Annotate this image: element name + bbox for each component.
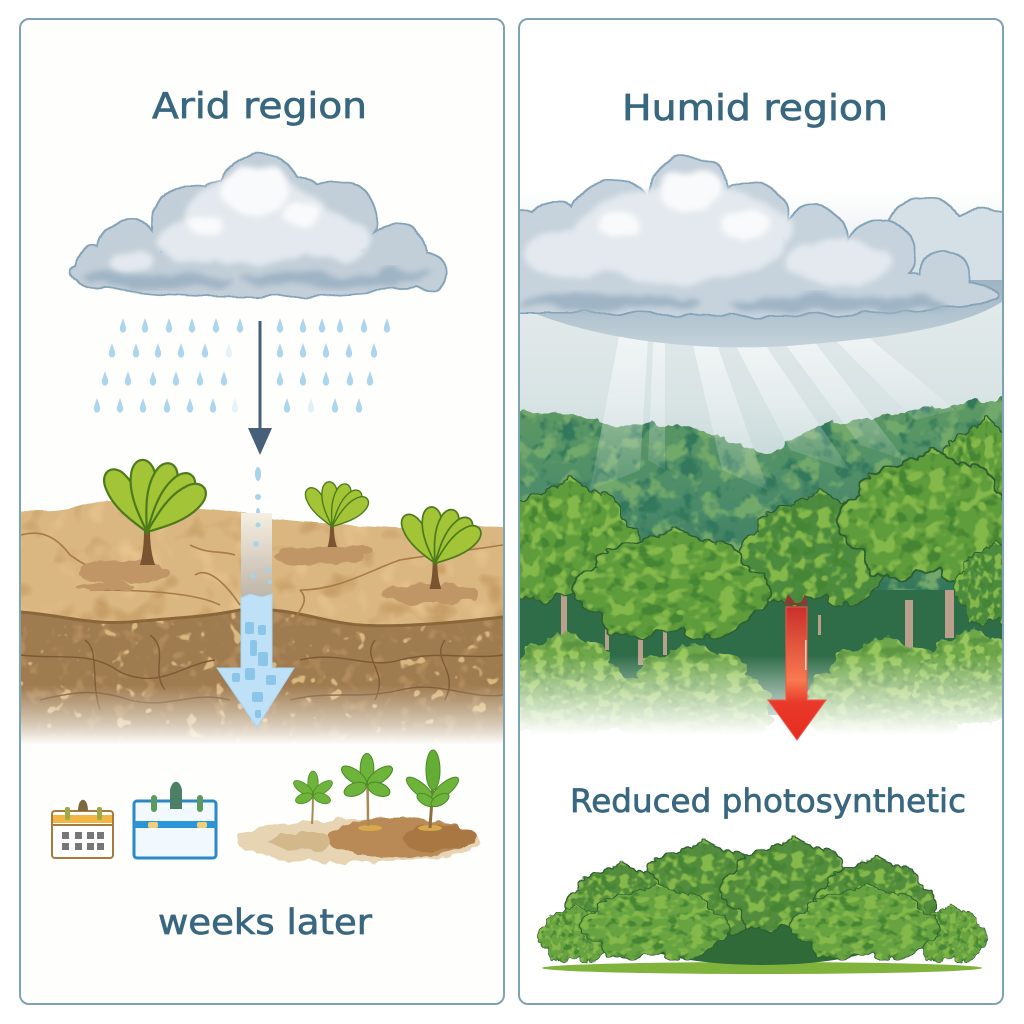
heading: arid region: Arid region	[152, 86, 367, 127]
arrow: reduced photosynthesis	[768, 594, 826, 740]
light rays	[590, 336, 954, 490]
icon: arid storm cloud	[70, 156, 446, 296]
panel: arid region	[15, 19, 510, 1004]
back cloud	[888, 197, 1002, 280]
arrow: rainfall downward	[248, 321, 272, 455]
rain drops	[94, 318, 390, 413]
arrow: slow infiltration	[217, 513, 294, 727]
forest: distant hill	[520, 396, 1002, 590]
plant: large wilted sprout	[98, 459, 212, 565]
heading: humid region: Humid region	[622, 88, 888, 129]
soil cracks	[21, 533, 503, 618]
plant: medium wilted sprout	[397, 506, 486, 589]
forest: canopy trees	[493, 420, 1024, 638]
illustration: shrub cluster	[538, 840, 987, 974]
forest: tree trunks	[561, 590, 954, 665]
icon: large blue calendar	[134, 782, 216, 858]
caption: reduced photosynthetic: Reduced photosynthetic	[570, 782, 966, 820]
forest: dark understory	[520, 590, 1002, 715]
subsoil cracks	[21, 635, 503, 710]
soil fade	[21, 688, 503, 752]
plant: small wilted sprout	[301, 481, 372, 547]
panel: humid region	[485, 19, 1024, 1004]
soil dark patches	[77, 546, 478, 604]
drops falling into soil	[255, 467, 261, 516]
caption: weeks later: weeks later	[158, 903, 373, 943]
sky background	[520, 213, 1002, 454]
storm cloud	[485, 158, 1005, 347]
forest fade	[520, 658, 1002, 751]
soil: cracked dry ground	[21, 500, 503, 742]
icon: small calendar	[52, 800, 113, 858]
illustration: recovered seedlings	[236, 750, 480, 863]
forest: foreground bushes	[520, 627, 1002, 732]
